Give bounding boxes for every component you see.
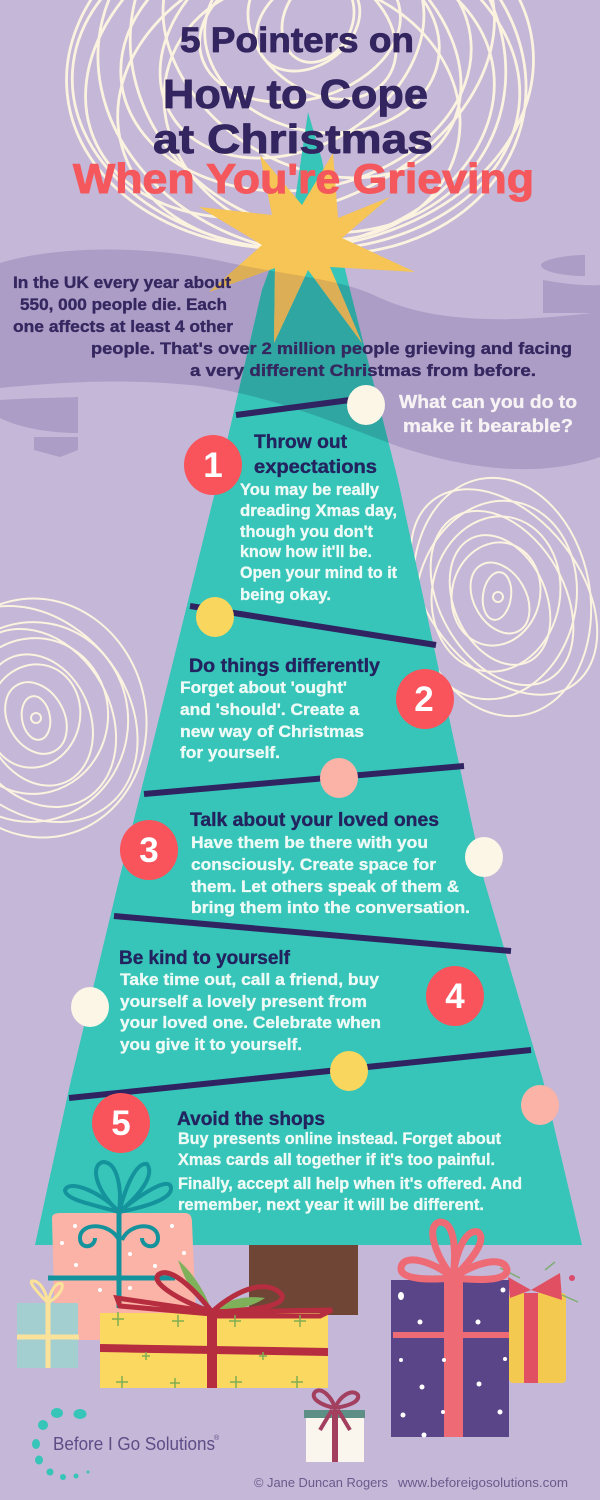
body 2: for yourself. xyxy=(180,743,280,762)
title: 5 Pointers on xyxy=(180,21,414,60)
divider line 2 xyxy=(190,606,436,645)
gift: pink xyxy=(48,1162,197,1340)
question callout: make it bearable? xyxy=(403,416,573,436)
ribbon scraps xyxy=(0,255,600,457)
body 4: Take time out, call a friend, buy xyxy=(120,970,380,989)
ornament pink xyxy=(320,758,358,798)
body 1 xyxy=(240,480,397,604)
body 3: consciously. Create space for xyxy=(191,855,436,874)
body 5: Buy presents online instead. Forget about xyxy=(178,1129,501,1148)
intro text: a very different Christmas from before. xyxy=(190,361,536,380)
body 5: Xmas cards all together if it's too painful. xyxy=(178,1150,495,1169)
footer credit: © Jane Duncan Rogers xyxy=(254,1476,388,1490)
number badge 4: 4 xyxy=(445,977,465,1016)
gift: yellow xyxy=(100,1260,332,1388)
body 4: your loved one. Celebrate when xyxy=(120,1013,381,1032)
number badge 1 xyxy=(184,435,242,495)
body 2 xyxy=(180,678,364,762)
star xyxy=(199,153,415,343)
question callout xyxy=(399,392,577,436)
step 2 xyxy=(180,656,454,762)
heading 3: Talk about your loved ones xyxy=(190,810,439,831)
ornament cream top xyxy=(347,385,385,425)
title xyxy=(73,21,534,202)
gift: small blue xyxy=(17,1281,79,1368)
ornament yellow bottom xyxy=(330,1051,368,1091)
star shape xyxy=(199,153,415,343)
logo xyxy=(32,1408,220,1480)
decoration line top xyxy=(236,400,350,415)
gift: purple xyxy=(391,1222,509,1438)
title: at Christmas xyxy=(153,116,433,162)
logo text: Before I Go Solutions xyxy=(53,1434,215,1454)
tree body xyxy=(35,112,582,1245)
scribble: left swirl xyxy=(0,564,180,864)
body 3: bring them into the conversation. xyxy=(191,898,470,917)
body 5 xyxy=(178,1129,522,1214)
heading 2: Do things differently xyxy=(189,656,380,677)
intro text: one affects at least 4 other xyxy=(13,317,233,336)
title: How to Cope xyxy=(163,71,428,117)
scribble: top swirl xyxy=(37,0,568,299)
tree shaded by wave xyxy=(238,270,389,443)
ornament yellow xyxy=(196,597,234,637)
body 5: remember, next year it will be different. xyxy=(178,1195,484,1214)
heading 1 xyxy=(254,432,377,478)
ornament cream left xyxy=(71,987,109,1027)
intro text: In the UK every year about xyxy=(13,273,231,292)
step 1 xyxy=(184,432,397,604)
star shaded part xyxy=(209,265,362,343)
number badge 2 xyxy=(396,669,454,729)
title: When You're Grieving xyxy=(73,155,534,202)
body 2: new way of Christmas xyxy=(180,722,364,741)
step 5 xyxy=(92,1093,522,1214)
divider line 4 xyxy=(114,916,511,951)
gift: yellow back xyxy=(500,1262,578,1383)
body 3 xyxy=(191,833,470,917)
body 1: Open your mind to it xyxy=(240,563,397,582)
number badge 5: 5 xyxy=(111,1104,131,1143)
body 4: you give it to yourself. xyxy=(120,1035,302,1054)
body 1: being okay. xyxy=(240,585,331,604)
body 2: and 'should'. Create a xyxy=(180,700,360,719)
divider line 5 xyxy=(69,1050,531,1098)
wave band xyxy=(0,250,600,469)
ornament pink right xyxy=(521,1085,559,1125)
step 3 xyxy=(120,810,470,917)
body 3: them. Let others speak of them & xyxy=(191,877,459,896)
intro text xyxy=(13,273,572,380)
number badge 3: 3 xyxy=(139,831,159,870)
question callout: What can you do to xyxy=(399,392,577,412)
body 1: You may be really xyxy=(240,480,380,499)
scribble: right swirl xyxy=(373,454,600,730)
gift: small white xyxy=(304,1390,365,1462)
heading 4: Be kind to yourself xyxy=(119,948,291,969)
number badge 1: 1 xyxy=(203,446,223,485)
body 2: Forget about 'ought' xyxy=(180,678,347,697)
number badge 2: 2 xyxy=(414,680,434,719)
footer credit xyxy=(254,1476,568,1490)
tree xyxy=(35,112,582,1315)
body 4: yourself a lovely present from xyxy=(120,992,367,1011)
body 3: Have them be there with you xyxy=(191,833,428,852)
body 4 xyxy=(120,970,381,1054)
footer credit: www.beforeigosolutions.com xyxy=(397,1476,568,1490)
body 1: know how it'll be. xyxy=(240,542,372,561)
divider line 3 xyxy=(144,766,464,794)
intro text: 550, 000 people die. Each xyxy=(20,295,227,314)
body 1: though you don't xyxy=(240,522,373,541)
heading 1: Throw out xyxy=(254,432,348,453)
tree trunk xyxy=(249,1245,358,1315)
number badge 3 xyxy=(120,820,178,880)
number badge 4 xyxy=(426,966,484,1026)
heading 1: expectations xyxy=(254,457,377,478)
body 5: Finally, accept all help when it's offered. And xyxy=(178,1174,522,1193)
step 4 xyxy=(119,948,484,1054)
registered mark: ® xyxy=(214,1434,220,1442)
intro text: people. That's over 2 million people grieving and facing xyxy=(91,339,572,358)
ornament cream right xyxy=(465,837,503,877)
heading 5: Avoid the shops xyxy=(177,1109,325,1130)
logo dots xyxy=(32,1408,90,1480)
number badge 5 xyxy=(92,1093,150,1153)
body 1: dreading Xmas day, xyxy=(240,501,397,520)
